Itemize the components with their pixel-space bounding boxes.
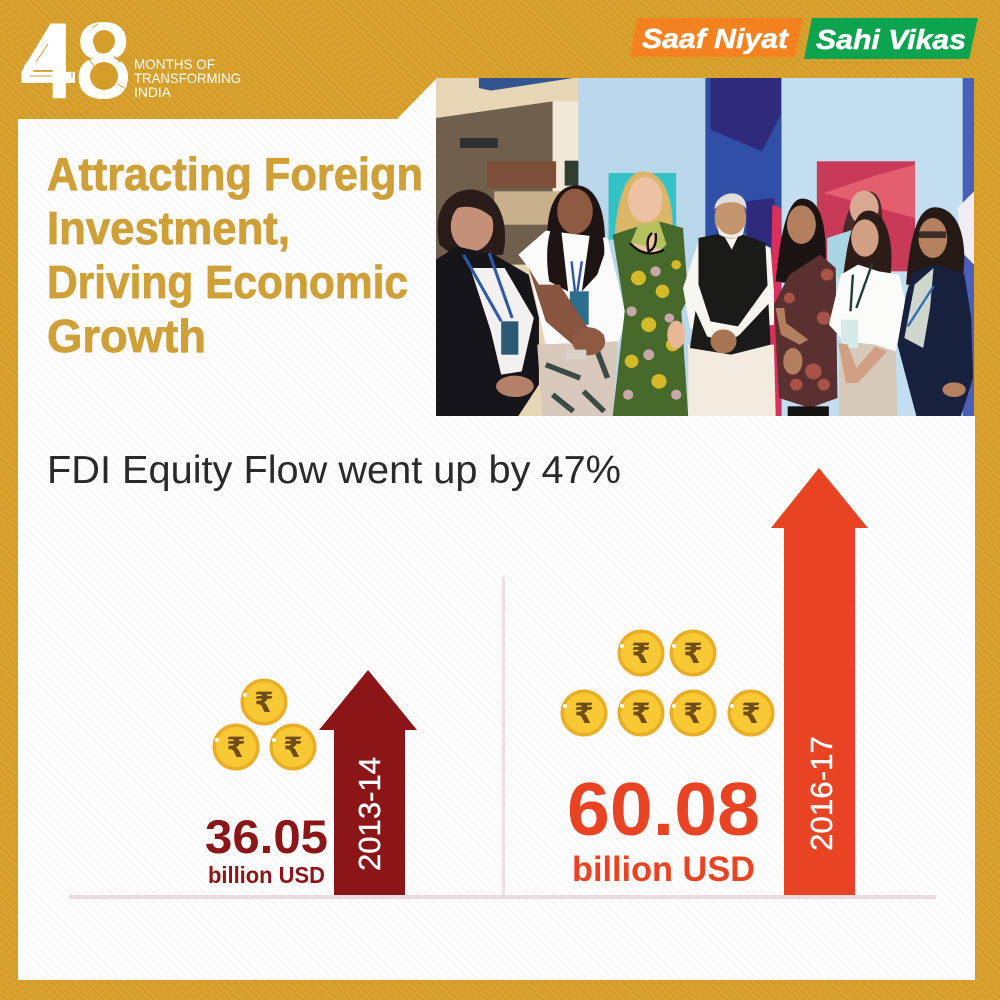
arrow: 2016-17 <box>771 468 868 895</box>
axis and divider <box>69 577 936 899</box>
value: 60.08 billion USD: 60.08 <box>567 767 760 851</box>
icons: coins 2016-17: ₹ <box>574 697 594 730</box>
arrow: 2013-14: 2013-14 <box>352 757 387 871</box>
icons: coins 2013-14: ₹ <box>254 686 274 719</box>
badge: Saaf Niyat <box>630 18 803 57</box>
person 5: woman in floral dress <box>774 199 837 416</box>
logo: 48 months of transforming India: MONTHS OF <box>134 56 215 72</box>
title: Investment, <box>47 202 290 254</box>
badge: Saaf Niyat: Saaf Niyat <box>642 23 790 54</box>
icons: coins 2013-14 <box>212 678 316 770</box>
title: Attracting Foreign <box>47 148 423 200</box>
icons: coins 2016-17: ₹ <box>741 697 761 730</box>
logo: 48 months of transforming India <box>20 0 241 122</box>
arrow: 2013-14 <box>319 670 417 895</box>
value: 60.08 billion USD: billion USD <box>572 850 755 889</box>
icons: coins 2016-17 <box>560 630 774 736</box>
title <box>47 148 423 362</box>
icons: coins 2016-17: ₹ <box>683 637 703 670</box>
value: 60.08 billion USD <box>567 767 760 889</box>
person 4: man in black vest and white kurta <box>683 193 776 416</box>
icons: coins 2016-17: ₹ <box>683 697 703 730</box>
person 2: woman in white blazer <box>518 185 626 416</box>
value: 36.05 billion USD: billion USD <box>208 862 325 888</box>
icons: coins 2013-14: ₹ <box>226 731 246 764</box>
person 3: woman in green floral dress <box>613 171 688 416</box>
person 7: woman in navy jacket <box>897 207 973 416</box>
value: 36.05 billion USD <box>205 810 328 888</box>
logo: 48 months of transforming India: TRANSFORMING <box>134 70 241 86</box>
icons: coins 2016-17: ₹ <box>631 637 651 670</box>
badge: Sahi Vikas: Sahi Vikas <box>816 24 966 55</box>
icons: coins 2013-14: ₹ <box>283 731 303 764</box>
photo: group portrait <box>436 78 974 416</box>
person 1: woman in black jacket <box>436 190 539 416</box>
subheading: FDI equity flow: FDI Equity Flow went up by 47% <box>47 449 621 492</box>
title: Growth <box>47 310 206 362</box>
person 6: woman in white shirt and beige skirt <box>829 211 905 416</box>
photo background <box>436 78 974 416</box>
title: Driving Economic <box>47 256 408 308</box>
arrow: 2016-17: 2016-17 <box>804 736 839 851</box>
badge: Sahi Vikas <box>804 18 978 59</box>
logo: 48 months of transforming India: 48 <box>20 0 131 122</box>
chart: FDI bars <box>69 468 936 899</box>
value: 36.05 billion USD: 36.05 <box>205 810 328 863</box>
icons: coins 2016-17: ₹ <box>631 697 651 730</box>
logo: 48 months of transforming India: INDIA <box>134 84 172 100</box>
